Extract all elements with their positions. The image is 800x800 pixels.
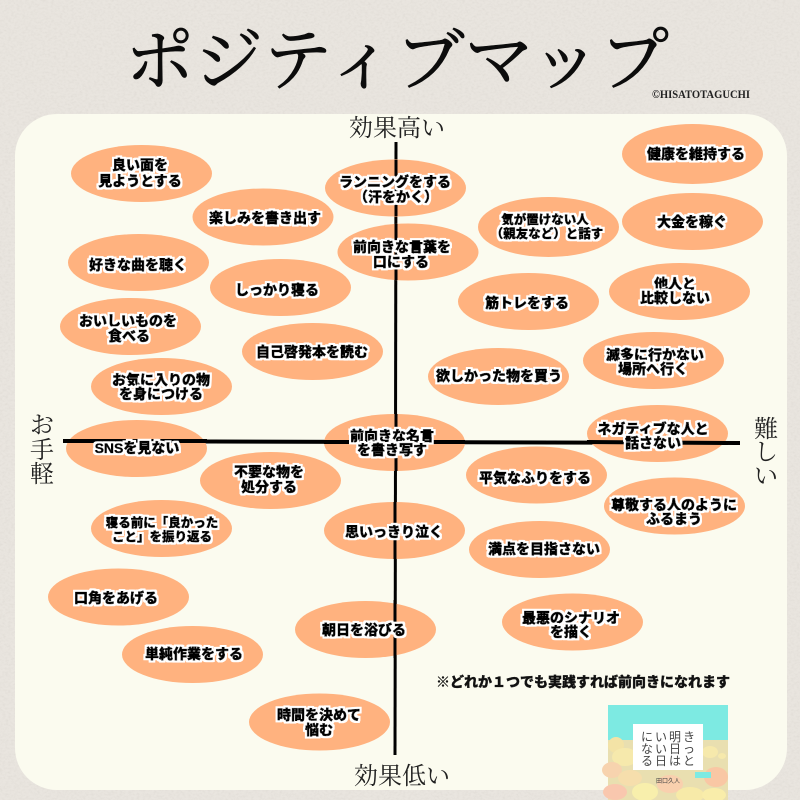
bubble: 他人と比較しない: 比較しない [640, 290, 710, 306]
book cover: 日 [669, 742, 681, 756]
bubble: 口角をあげる [48, 568, 189, 626]
bubble: ネガティブな人と話さない: 話さない [625, 435, 681, 451]
bubble: 平気なふりをする: 平気なふりをする [479, 470, 591, 486]
label: difficult: い [754, 464, 778, 490]
book cover: 日 [655, 754, 667, 768]
title: ポジティブマップ [125, 23, 669, 99]
label: difficult: し [754, 440, 778, 466]
bubble: 朝日を浴びる: 朝日を浴びる [322, 622, 406, 638]
bubble: 尊敬する人のようにふるまう [604, 478, 745, 534]
bubble: ランニングをする（汗をかく） [325, 160, 466, 216]
bubble: 大金を稼ぐ [622, 193, 763, 250]
bubble: ランニングをする（汗をかく）: ランニングをする [339, 174, 451, 190]
bubble: 自己啓発本を読む [242, 323, 383, 380]
bubble: 不要な物を処分する: 不要な物を [234, 464, 304, 480]
book cover: 明 [669, 730, 681, 744]
book cover: る [641, 754, 653, 768]
bubble: しっかり寝る: しっかり寝る [235, 282, 319, 298]
copyright: ©HISATOTAGUCHI [652, 89, 750, 101]
bubble: SNSを見ない: SNSを見ない [95, 440, 179, 456]
bubble: しっかり寝る [210, 259, 351, 316]
bubble: 寝る前に「良かったこと」を振り返る [91, 500, 232, 557]
label: easy: お [30, 413, 54, 439]
bubble: 単純作業をする: 単純作業をする [145, 646, 243, 662]
label: easy: 手 [30, 437, 54, 464]
bubble: 時間を決めて悩む: 時間を決めて [277, 707, 361, 723]
bubble: 満点を目指さない: 満点を目指さない [488, 541, 600, 557]
bubble: 他人と比較しない: 他人と [654, 276, 696, 292]
bubble: 筋トレをする: 筋トレをする [485, 295, 569, 311]
bubble: 楽しみを書き出す: 楽しみを書き出す [209, 210, 321, 226]
bubble: 時間を決めて悩む: 悩む [305, 722, 333, 738]
bubble: 単純作業をする [122, 626, 263, 683]
bubble: 自己啓発本を読む: 自己啓発本を読む [256, 344, 368, 360]
book cover: っ [683, 742, 695, 756]
bubble: 不要な物を処分する: 処分する [241, 479, 297, 495]
book cover [602, 705, 728, 800]
bubble: 口角をあげる: 口角をあげる [74, 590, 158, 606]
bubble: 前向きな名言を書き写す [324, 414, 465, 471]
bubble: 欲しかった物を買う: 欲しかった物を買う [436, 368, 562, 384]
bubble: 最悪のシナリオを描く [502, 594, 643, 650]
bubble: 良い面を見ようとする [71, 145, 212, 202]
bubble: 時間を決めて悩む [249, 694, 390, 750]
bubble: 前向きな名言を書き写す: を書き写す [357, 442, 427, 458]
book cover: 田口久人 [656, 777, 680, 785]
bubble: 前向きな言葉を口にする: 前向きな言葉を [353, 239, 451, 255]
bubble: ランニングをする（汗をかく）: （汗をかく） [354, 189, 438, 205]
bubble: 前向きな言葉を口にする [338, 224, 478, 280]
book cover: い [655, 730, 667, 744]
label: difficult: 難 [754, 416, 778, 443]
book cover: と [683, 754, 695, 768]
bubble: お気に入りの物を身につける [91, 358, 232, 415]
label: low effect: 効果低い [354, 763, 450, 790]
bubble: 滅多に行かない場所へ行く: 滅多に行かない [606, 347, 704, 363]
vertical axis [395, 142, 396, 755]
note: ※どれか１つでも実践すれば前向きになれます [436, 674, 730, 690]
bubble: おいしいものを食べる [60, 298, 201, 355]
bubble: ネガティブな人と話さない: ネガティブな人と [597, 421, 709, 437]
bubble: 最悪のシナリオを描く: 最悪のシナリオ [522, 610, 620, 626]
bubble: 良い面を見ようとする: 良い面を [112, 157, 168, 173]
bubble: ネガティブな人と話さない [587, 405, 728, 462]
bubble: 最悪のシナリオを描く: を描く [550, 624, 592, 640]
label: high effect: 効果高い [349, 115, 445, 142]
label: easy: 軽 [30, 461, 54, 488]
bubble: 健康を維持する: 健康を維持する [647, 146, 745, 162]
bubble: 寝る前に「良かったこと」を振り返る: こと」を振り返る [112, 529, 212, 544]
bubble: 前向きな言葉を口にする: 口にする [373, 254, 429, 270]
bubble: 好きな曲を聴く [68, 234, 209, 291]
bubble: 欲しかった物を買う [428, 348, 569, 405]
bubble: 滅多に行かない場所へ行く: 場所へ行く [618, 361, 688, 377]
bubble: 平気なふりをする [466, 446, 607, 504]
bubble: おいしいものを食べる: おいしいものを [79, 313, 177, 329]
bubble: 健康を維持する [622, 124, 763, 184]
bubble: 良い面を見ようとする: 見ようとする [98, 173, 182, 189]
bubble: SNSを見ない [66, 420, 207, 477]
book cover: は [669, 754, 681, 768]
bubble: おいしいものを食べる: 食べる [108, 328, 150, 344]
bubble: お気に入りの物を身につける: を身につける [119, 386, 203, 402]
bubble: 寝る前に「良かったこと」を振り返る: 寝る前に「良かった [106, 515, 218, 530]
bubble: 尊敬する人のようにふるまう: 尊敬する人のように [611, 497, 737, 513]
horizontal axis [63, 441, 740, 443]
bubble: 思いっきり泣く: 思いっきり泣く [345, 524, 443, 540]
bubble: 満点を目指さない [469, 521, 610, 578]
bubble: 気が置けない人（親友など）と話す: （親友など）と話す [491, 226, 603, 241]
bubble: 不要な物を処分する [200, 452, 341, 509]
book cover: き [683, 730, 695, 744]
bubble: 他人と比較しない [609, 263, 750, 320]
book cover: い [655, 742, 667, 756]
bubble: 前向きな名言を書き写す: 前向きな名言 [350, 428, 434, 444]
bubble: 思いっきり泣く [324, 502, 465, 559]
book cover: に [641, 730, 653, 744]
bubble: 筋トレをする [458, 273, 599, 330]
bubble: 滅多に行かない場所へ行く [583, 332, 724, 389]
bubble: 朝日を浴びる [295, 600, 436, 658]
bubble: 大金を稼ぐ: 大金を稼ぐ [657, 214, 727, 230]
bubble: 気が置けない人（親友など）と話す: 気が置けない人 [501, 212, 589, 227]
bubble: 尊敬する人のようにふるまう: ふるまう [646, 511, 702, 527]
bubble: お気に入りの物を身につける: お気に入りの物 [112, 372, 210, 388]
bubble: 気が置けない人（親友など）と話す [478, 197, 619, 257]
bubble: 楽しみを書き出す [192, 188, 334, 246]
book cover: な [641, 742, 653, 756]
bubble: 好きな曲を聴く: 好きな曲を聴く [89, 257, 187, 273]
